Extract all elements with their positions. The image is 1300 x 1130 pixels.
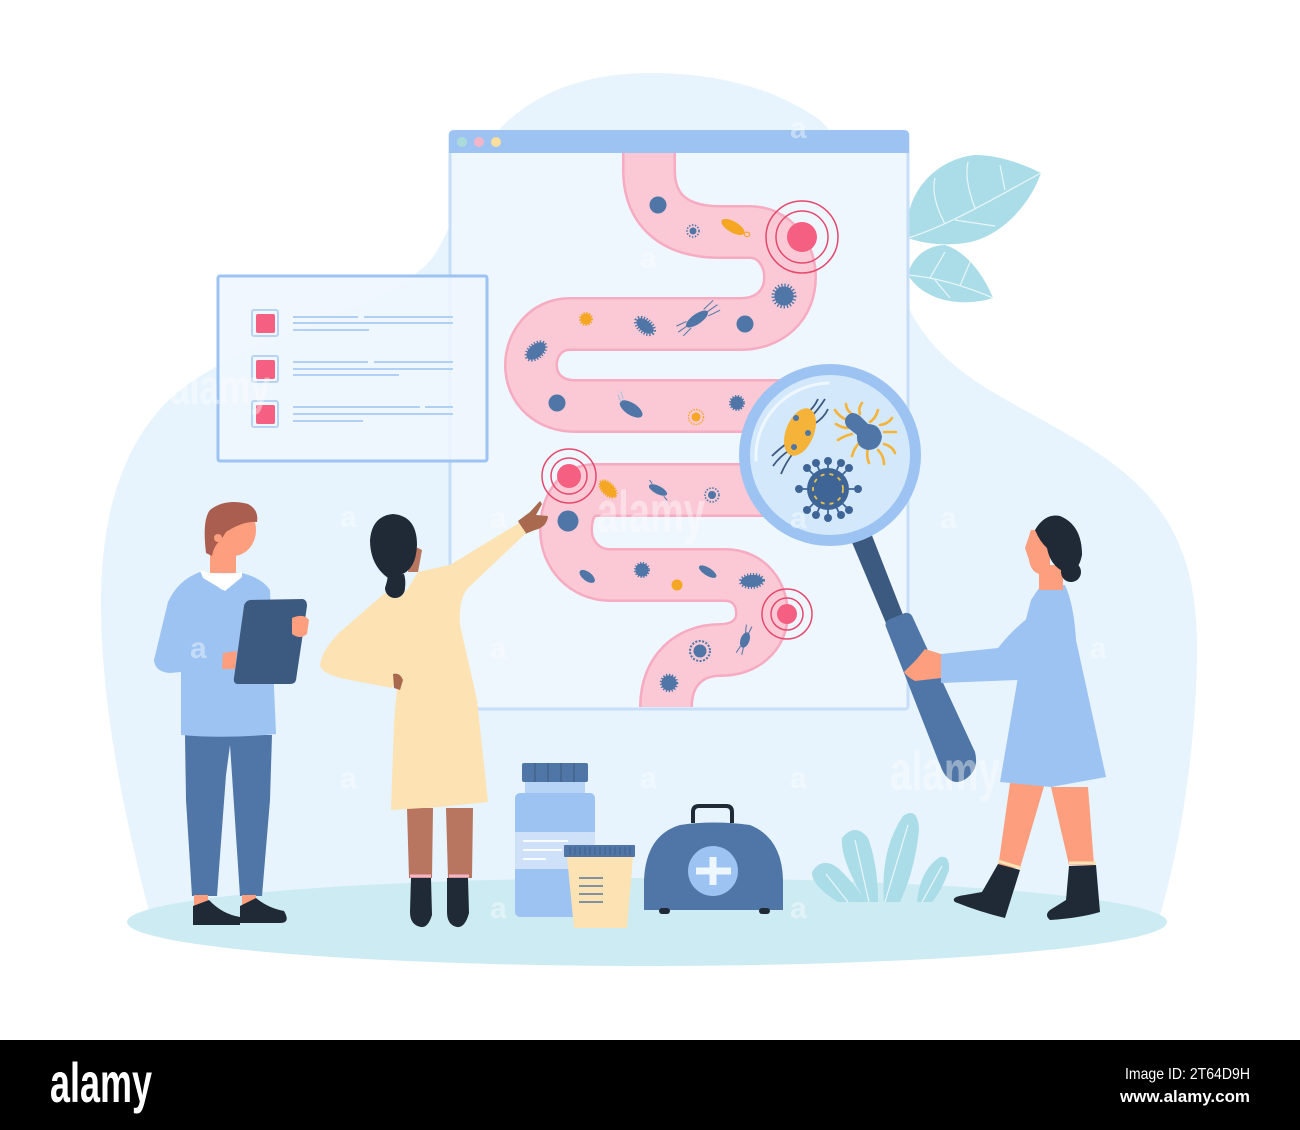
first aid case	[644, 806, 783, 914]
woman hand	[904, 649, 941, 681]
watermark: a	[940, 502, 957, 535]
woman socks	[410, 878, 469, 927]
leaf: large	[907, 155, 1041, 244]
man shoes	[193, 898, 287, 925]
checklist panel	[218, 276, 487, 461]
magnified virus	[795, 457, 862, 522]
leaf: small	[908, 245, 993, 302]
watermark: a	[790, 892, 807, 925]
ground ellipse	[127, 878, 1167, 966]
watermark: a	[790, 112, 807, 145]
watermark: a	[490, 502, 507, 535]
woman boots	[954, 864, 1100, 920]
man head	[200, 502, 257, 591]
person: woman with magnifier	[904, 516, 1106, 920]
decorative leaves	[907, 155, 1041, 302]
watermark: a	[490, 632, 507, 665]
checklist item 1	[252, 310, 453, 336]
watermark: a	[790, 762, 807, 795]
watermark: a	[340, 762, 357, 795]
woman head	[370, 514, 422, 578]
footer url: www.alamy.com	[1119, 1087, 1250, 1106]
checklist item 2	[252, 356, 453, 382]
magnifier lens	[744, 370, 916, 540]
background blob	[101, 73, 1197, 915]
watermark: a	[640, 762, 657, 795]
watermark: a	[340, 501, 357, 534]
watermark: a	[790, 502, 807, 535]
man legs	[185, 735, 272, 907]
inflammation spot: top	[766, 201, 838, 273]
watermark	[170, 112, 1107, 925]
watermark: a	[640, 242, 657, 275]
watermark: alamy	[597, 480, 705, 545]
person: woman pointing	[320, 501, 548, 927]
man hands	[222, 616, 309, 669]
footer logo: alamy	[50, 1051, 152, 1114]
plant	[812, 813, 949, 902]
magnified yellow bacterium	[772, 399, 828, 474]
woman dress	[1000, 585, 1106, 787]
intestine	[531, 153, 830, 707]
magnified blue bacterium with orange filaments	[835, 403, 896, 464]
woman ponytail	[385, 574, 405, 598]
woman hand on hip	[393, 674, 403, 690]
man torso	[154, 572, 276, 737]
magnifier handle	[851, 533, 976, 782]
bacteria in intestine	[523, 196, 794, 690]
man tablet	[234, 599, 307, 684]
watermark: a	[1090, 632, 1107, 665]
woman legs	[998, 783, 1096, 868]
woman sleeve	[941, 603, 1066, 683]
woman legs	[407, 808, 473, 878]
watermark: a	[490, 892, 507, 925]
window title bar	[449, 130, 909, 153]
footer bar	[0, 1040, 1300, 1130]
medicine bottle	[515, 763, 595, 917]
woman head	[1025, 516, 1082, 590]
watermark: a	[190, 632, 207, 665]
woman dress	[320, 523, 526, 810]
woman arm pointing hand	[518, 501, 548, 534]
footer image id: Image ID: 2T64D9H	[1125, 1066, 1250, 1083]
specimen cup	[564, 845, 635, 928]
watermark: alamy	[170, 359, 270, 415]
inflammation spot: bottom	[762, 589, 812, 639]
watermark: alamy	[890, 739, 1000, 802]
magnifying glass	[744, 370, 976, 782]
inflammation spot: middle	[542, 449, 596, 503]
checklist item 3	[252, 401, 453, 427]
browser window panel	[449, 130, 909, 709]
